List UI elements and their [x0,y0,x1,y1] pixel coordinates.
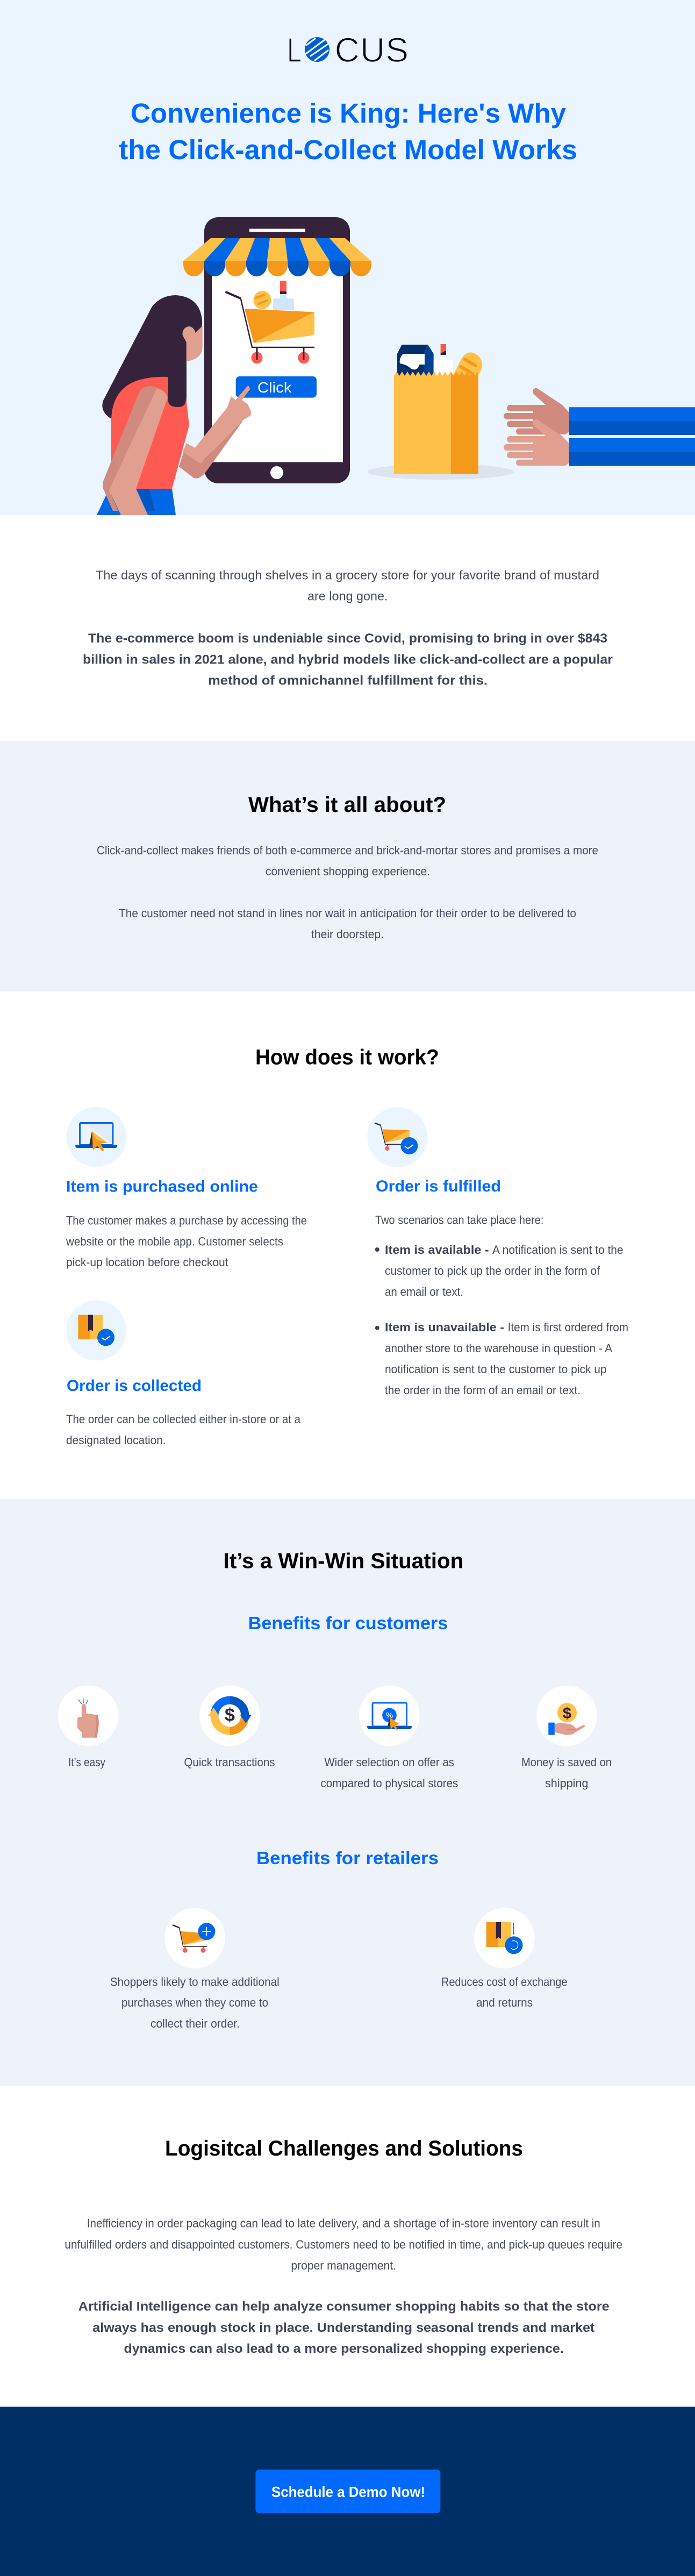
bullet: item is available: an email or text. [385,1285,463,1298]
button: schedule a demo [255,2470,440,2513]
label: shipping [545,1776,588,1790]
intro text: are long gone. [307,589,388,603]
bullet: item is unavailable: Item is unavailable - [385,1321,504,1334]
sleeve: upper arm [569,407,695,435]
intro text [96,568,599,603]
step text: The order can be collected either in-store or at a [66,1412,301,1426]
intro bold text: method of omnichannel fulfillment for this. [208,673,488,688]
bullet: item is unavailable: notification is sent to the customer to pick up [385,1362,607,1376]
step text: pick-up location before checkout [66,1255,228,1269]
panel: hero [0,0,695,515]
label: Quick transactions [184,1756,275,1769]
label: and returns [476,1996,533,2009]
panel: introduction [0,515,695,741]
icon: cart with check [367,1107,427,1167]
step title: Order is collected [67,1377,202,1395]
label [521,1756,612,1790]
step: order is collected [66,1300,301,1447]
icon: milk carton [397,345,434,376]
step text: designated location. [66,1433,166,1447]
panel: win-win situation [0,1499,695,2086]
benefit: wider selection [320,1686,458,1790]
step: order is fulfilled [367,1107,628,1397]
icon: shopping cart on screen [226,281,314,363]
illustration: reaching hands [504,388,695,466]
bullet: item is unavailable: Item is first ordered from [508,1321,628,1334]
subheading: benefits for customers: Benefits for customers [248,1613,448,1633]
icon: lower hand [504,419,569,466]
step text: website or the mobile app. Customer selects [66,1235,283,1248]
logo: Locus: CUS [335,31,409,69]
bullet: item is available [375,1243,624,1298]
awning [183,238,371,276]
solutions bold text: dynamics can also lead to a more personalized shopping experience. [124,2342,564,2356]
icon: coin over hand [536,1686,597,1746]
icon: baguette [453,352,482,376]
label [441,1975,567,2009]
intro bold text: billion in sales in 2021 alone, and hybrid models like click-and-collect are a popular [83,652,613,667]
benefit: money saved [521,1686,612,1790]
icon: cart with plus [164,1908,225,1968]
about text: their doorstep. [311,927,384,941]
step title: Order is fulfilled [376,1178,501,1195]
benefit: reduced returns cost [441,1908,567,2009]
label: purchases when they come to [121,1996,268,2009]
label: It’s easy [68,1756,105,1769]
solutions bold text: Artificial Intelligence can help analyze consumer shopping habits so that the store [78,2300,610,2314]
panel: call to action footer [0,2407,695,2576]
button: Click [236,376,317,398]
button: Click: Click [257,379,292,396]
logo: Locus: L [287,31,302,69]
subheading: benefits for retailers: Benefits for retailers [256,1848,439,1868]
step: item is purchased online [66,1107,307,1269]
step title: Item is purchased online [66,1178,258,1195]
challenges text [65,2217,622,2272]
bullet: item is available: Item is available - [385,1243,489,1257]
step text [66,1214,307,1269]
illustration: woman tapping phone [97,295,251,515]
icon: upper hand [504,388,569,434]
label: compared to physical stores [320,1776,458,1790]
button: schedule a demo: Schedule a Demo Now! [271,2484,425,2500]
solutions bold text: always has enough stock in place. Understanding seasonal trends and market [92,2321,594,2335]
solutions bold text [78,2300,610,2356]
icon: laptop cursor [66,1107,126,1167]
label [320,1756,458,1790]
bullet: item is unavailable: the order in the form of an email or text. [385,1383,581,1397]
icon: laptop with discount: % [386,1711,393,1720]
title [119,98,577,165]
icon: money cycle: $ [225,1705,235,1725]
heading: It’s a Win-Win Situation [224,1550,463,1573]
label: Money is saved on [521,1756,612,1769]
heading: Logisitcal Challenges and Solutions [165,2137,523,2160]
benefit: it's easy [58,1686,118,1769]
label: Shoppers likely to make additional [110,1975,280,1988]
bullet: item is unavailable [375,1321,628,1397]
step intro: Two scenarios can take place here: [375,1213,543,1226]
challenges text: unfulfilled orders and disappointed customers. Customers need to be notified in time, and pick-up queues require [65,2238,622,2251]
icon: coin over hand: $ [563,1705,571,1722]
step text [66,1412,301,1447]
heading: How does it work? [255,1045,439,1069]
benefit: quick transactions [184,1686,275,1769]
illustration: grocery bag [368,344,514,480]
icon: box with return arrow [474,1908,535,1968]
illustration: phone storefront [183,217,371,483]
heading: What’s it all about? [248,793,446,817]
about text [97,844,598,941]
label: collect their order. [151,2017,240,2030]
logo: Locus [287,31,409,69]
bullet: item is available: A notification is sent to the [492,1243,624,1257]
label: Wider selection on offer as [324,1756,454,1769]
panel: what's it all about [0,741,695,991]
label [110,1975,280,2030]
intro bold text [83,631,613,688]
panel: logistical challenges and solutions [0,2086,695,2407]
icon: bottle [434,344,453,377]
bullet: item is unavailable: another store to the warehouse in question - A [385,1341,612,1355]
icon: box with check [66,1300,126,1360]
about text: convenient shopping experience. [266,865,430,878]
bullet: item is available: customer to pick up the order in the form of [385,1264,600,1278]
title: the Click-and-Collect Model Works [119,134,577,165]
sleeve: lower arm [569,438,695,466]
icon: laptop with discount [359,1686,420,1746]
about text: Click-and-collect makes friends of both e-commerce and brick-and-mortar stores and promises a more [97,844,598,857]
about text: The customer need not stand in lines nor wait in anticipation for their order to be delivered to [119,907,576,920]
challenges text: proper management. [291,2259,396,2272]
intro bold text: The e-commerce boom is undeniable since Covid, promising to bring in over $843 [88,631,607,646]
panel: how does it work [0,991,695,1499]
icon: money cycle [199,1686,260,1746]
title: Convenience is King: Here's Why [131,98,567,129]
step text: The customer makes a purchase by accessing the [66,1214,307,1228]
challenges text: Inefficiency in order packaging can lead to late delivery, and a shortage of in-store inventory can result in [87,2217,600,2230]
icon: pointing finger [58,1686,118,1746]
benefit: additional purchases [110,1908,280,2030]
intro text: The days of scanning through shelves in a grocery store for your favorite brand of mustard [96,568,599,582]
label: Reduces cost of exchange [441,1975,567,1988]
